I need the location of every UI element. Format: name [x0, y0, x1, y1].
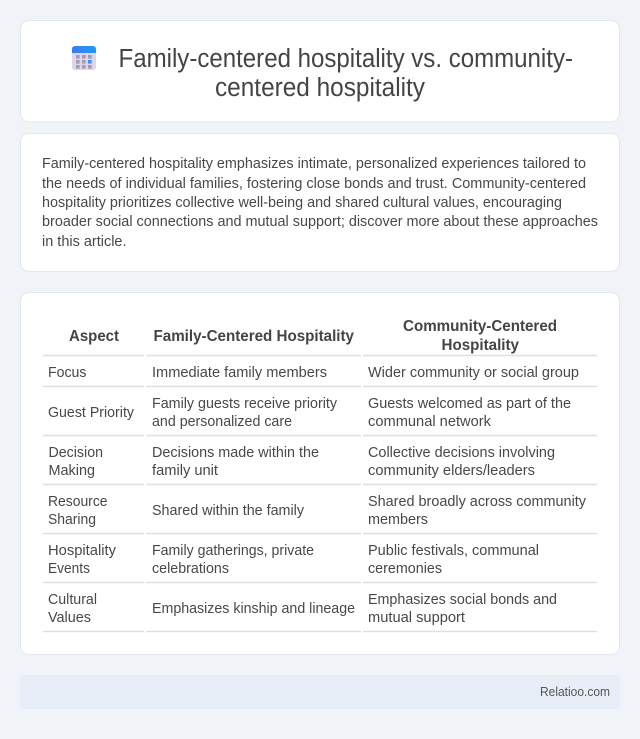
table row: guest priority: Guest Priority [48, 405, 135, 421]
table row: cultural values: Cultural [48, 592, 97, 608]
table row: decision making: Decision [48, 445, 103, 461]
text block: intro paragraph: the needs of individual families, fostering close bonds and trust. Community-centered [42, 175, 586, 192]
table row: hospitality events: Hospitality [48, 543, 117, 559]
table row: focus [48, 365, 579, 381]
panel: title card [20, 20, 620, 122]
table row: cultural values: Values [48, 610, 91, 626]
table row: resource sharing: Resource [48, 494, 108, 510]
table row: focus: Wider community or social group [368, 365, 579, 381]
text block: intro paragraph [42, 155, 598, 250]
table row: cultural values [48, 592, 557, 626]
table header row: Hospitality [442, 337, 519, 354]
table header row [69, 318, 557, 354]
table row: guest priority: communal network [368, 414, 492, 430]
table row: decision making: Collective decisions involving [368, 445, 555, 461]
table row: decision making: family unit [152, 463, 218, 479]
text block: intro paragraph: Family-centered hospitality emphasizes intimate, personalized experiences tailored to [42, 155, 586, 172]
table row: cultural values: Emphasizes social bonds and [368, 592, 557, 608]
table row: decision making: Making [48, 463, 95, 479]
table row: hospitality events: Public festivals, communal [368, 543, 539, 559]
table row: resource sharing: Sharing [48, 512, 96, 528]
table row: cultural values: mutual support [368, 610, 465, 626]
table row: resource sharing: Shared within the family [152, 503, 305, 519]
table row: hospitality events: Family gatherings, private [152, 543, 314, 559]
table row: resource sharing: Shared broadly across community [368, 494, 587, 510]
table row: hospitality events: Events [48, 561, 90, 577]
table row: hospitality events [48, 543, 539, 577]
table header row: Family-Centered Hospitality [154, 328, 354, 345]
table row: hospitality events: celebrations [152, 561, 229, 577]
icon: calendar [72, 46, 96, 70]
table row: guest priority [48, 396, 571, 430]
footer bar [20, 675, 620, 709]
footer credit: Relatioo.com [540, 685, 610, 699]
panel: introduction [20, 134, 620, 272]
table row: focus: Focus [48, 365, 86, 381]
title [118, 45, 573, 102]
table row: resource sharing: members [368, 512, 428, 528]
table row: guest priority: and personalized care [152, 414, 292, 430]
text block: intro paragraph: in this article. [42, 233, 126, 250]
table row: decision making [48, 445, 555, 479]
panel: comparison table [20, 292, 620, 654]
table row: cultural values: Emphasizes kinship and lineage [152, 601, 355, 617]
title: Family-centered hospitality vs. community- [118, 45, 573, 73]
table row: guest priority: Guests welcomed as part of the [368, 396, 571, 412]
table row: hospitality events: ceremonies [368, 561, 442, 577]
table header row: Aspect [69, 328, 120, 345]
table row: decision making: Decisions made within the [152, 445, 319, 461]
table row: guest priority: Family guests receive priority [152, 396, 338, 412]
table row: resource sharing [48, 494, 587, 528]
table row: decision making: community elders/leaders [368, 463, 535, 479]
table header row: Community-Centered [403, 318, 557, 335]
text block: intro paragraph: broader social connections and mutual support; discover more about these approaches [42, 213, 598, 230]
title: centered hospitality [215, 74, 425, 102]
table row: focus: Immediate family members [152, 365, 327, 381]
text block: intro paragraph: hospitality prioritizes collective well-being and shared cultural values, encouraging [42, 194, 562, 211]
